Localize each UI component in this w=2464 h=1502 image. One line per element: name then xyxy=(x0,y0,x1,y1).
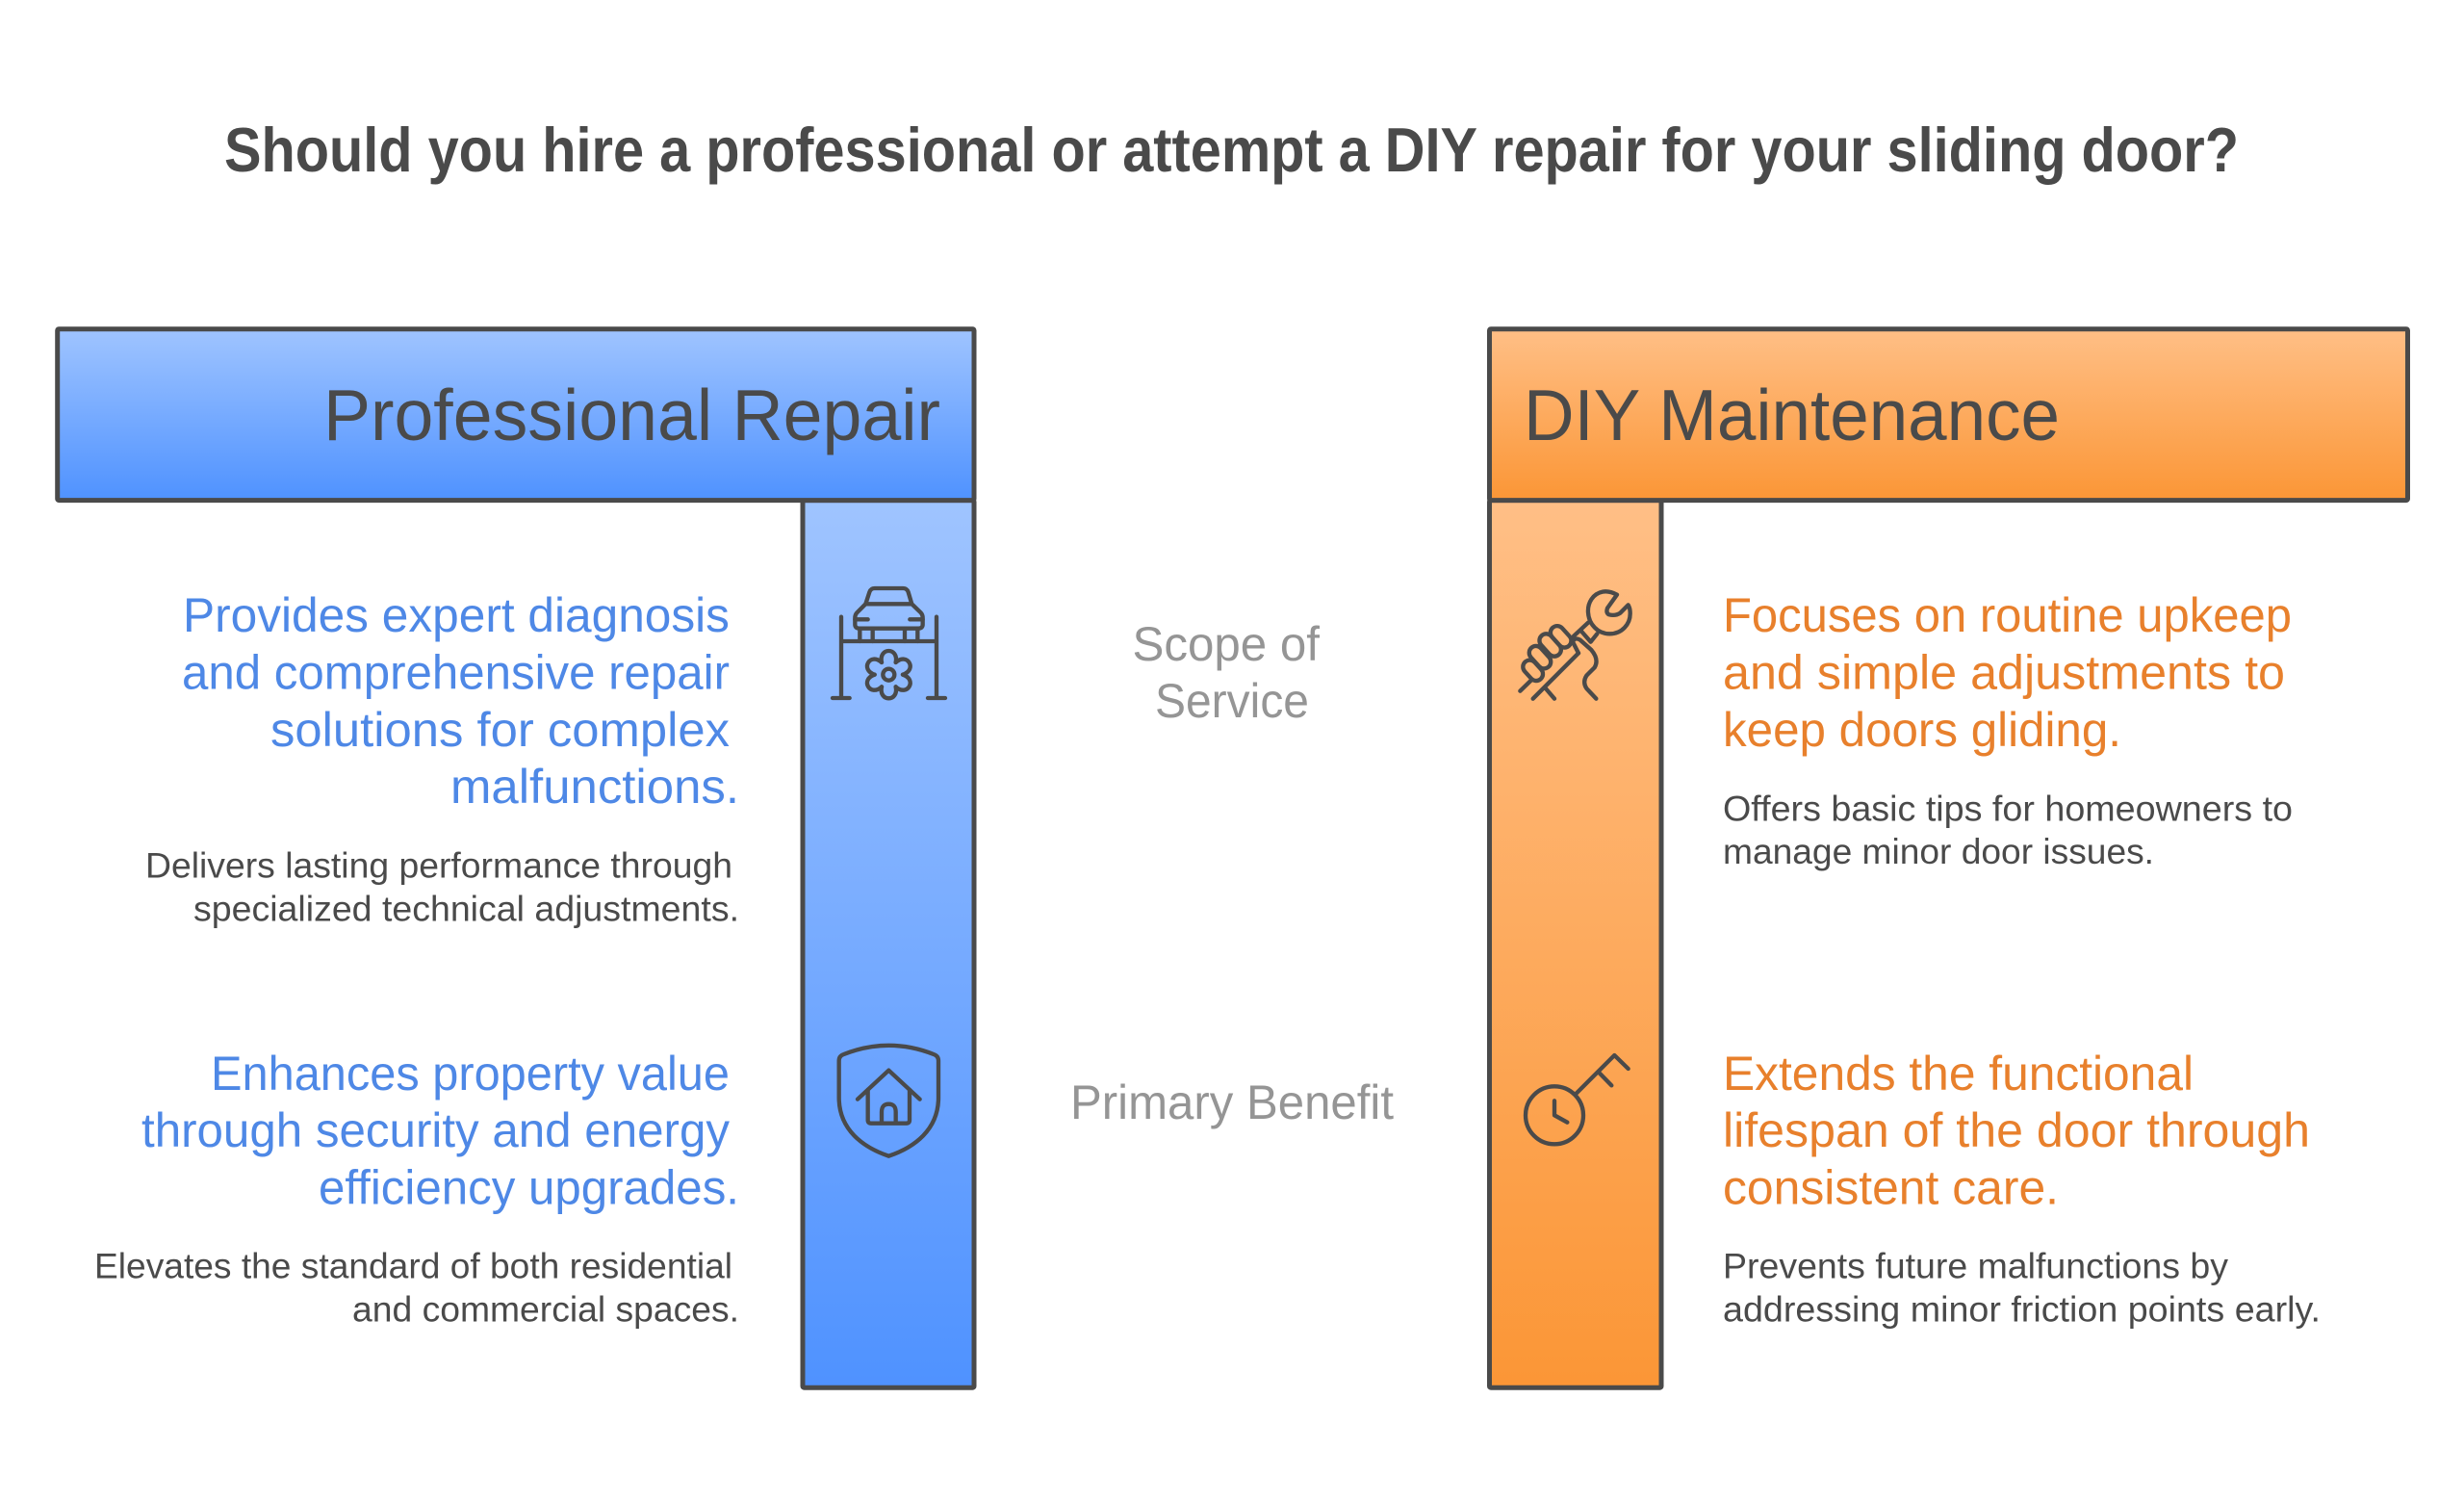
detail text xyxy=(1723,790,2293,871)
heading text: Enhances property value xyxy=(211,1047,730,1101)
detail text: Delivers lasting performance through xyxy=(145,845,732,886)
detail text: Elevates the standard of both residential xyxy=(94,1246,732,1286)
header bar: professional repair xyxy=(58,329,974,501)
detail text xyxy=(1723,1246,2321,1329)
text block: primary benefit (diy) xyxy=(1723,1047,2321,1329)
heading text: Provides expert diagnosis xyxy=(183,588,730,642)
heading: diy maintenance: DIY Maintenance xyxy=(1524,375,2060,455)
heading text: and comprehensive repair xyxy=(182,645,730,699)
heading text: solutions for complex xyxy=(270,703,730,757)
text block: primary benefit (professional) xyxy=(94,1047,739,1329)
detail text xyxy=(145,845,739,928)
detail text: and commercial spaces. xyxy=(352,1290,739,1329)
label: scope of service: Scope of xyxy=(1132,617,1320,671)
column: diy maintenance xyxy=(1490,501,1661,1387)
detail text: manage minor door issues. xyxy=(1723,832,2154,871)
title: Should you hire a professional or attempt a DIY repair for your sliding door? xyxy=(224,116,2239,185)
column: professional repair xyxy=(803,501,974,1387)
detail text: specialized technical adjustments. xyxy=(193,890,739,928)
heading text: through security and energy xyxy=(141,1103,730,1157)
detail text: Prevents future malfunctions by xyxy=(1723,1246,2228,1286)
panel: professional repair xyxy=(58,329,974,1387)
heading text xyxy=(182,588,739,814)
icon: shield with house xyxy=(839,1046,938,1156)
header bar: diy maintenance xyxy=(1490,329,2408,501)
label: primary benefit: Primary Benefit xyxy=(1070,1075,1394,1129)
detail text: addressing minor friction points early. xyxy=(1723,1290,2321,1329)
heading text: Focuses on routine upkeep xyxy=(1723,588,2292,642)
icon: key with clock xyxy=(1526,1055,1629,1144)
heading text: consistent care. xyxy=(1723,1161,2059,1215)
panel: diy maintenance xyxy=(1490,329,2408,1387)
icon: car lift with gear xyxy=(833,588,945,698)
detail text: Offers basic tips for homeowners to xyxy=(1723,790,2293,828)
heading text xyxy=(1723,588,2292,757)
heading text: and simple adjustments to xyxy=(1723,645,2285,699)
heading text xyxy=(141,1047,739,1215)
heading text: efficiency upgrades. xyxy=(319,1161,739,1215)
label: scope of service: Service xyxy=(1155,674,1309,728)
heading text: Extends the functional xyxy=(1723,1047,2194,1101)
heading text: lifespan of the door through xyxy=(1723,1103,2310,1157)
detail text xyxy=(94,1246,739,1329)
heading text: malfunctions. xyxy=(450,760,739,814)
icon: hand holding wrench xyxy=(1520,591,1630,699)
text block: scope of service (professional) xyxy=(145,588,739,928)
text block: scope of service (diy) xyxy=(1723,588,2293,871)
heading text xyxy=(1723,1047,2310,1215)
heading: professional repair: Professional Repair xyxy=(323,375,940,455)
heading text: keep doors gliding. xyxy=(1723,703,2121,757)
label: scope of service xyxy=(1132,617,1320,728)
